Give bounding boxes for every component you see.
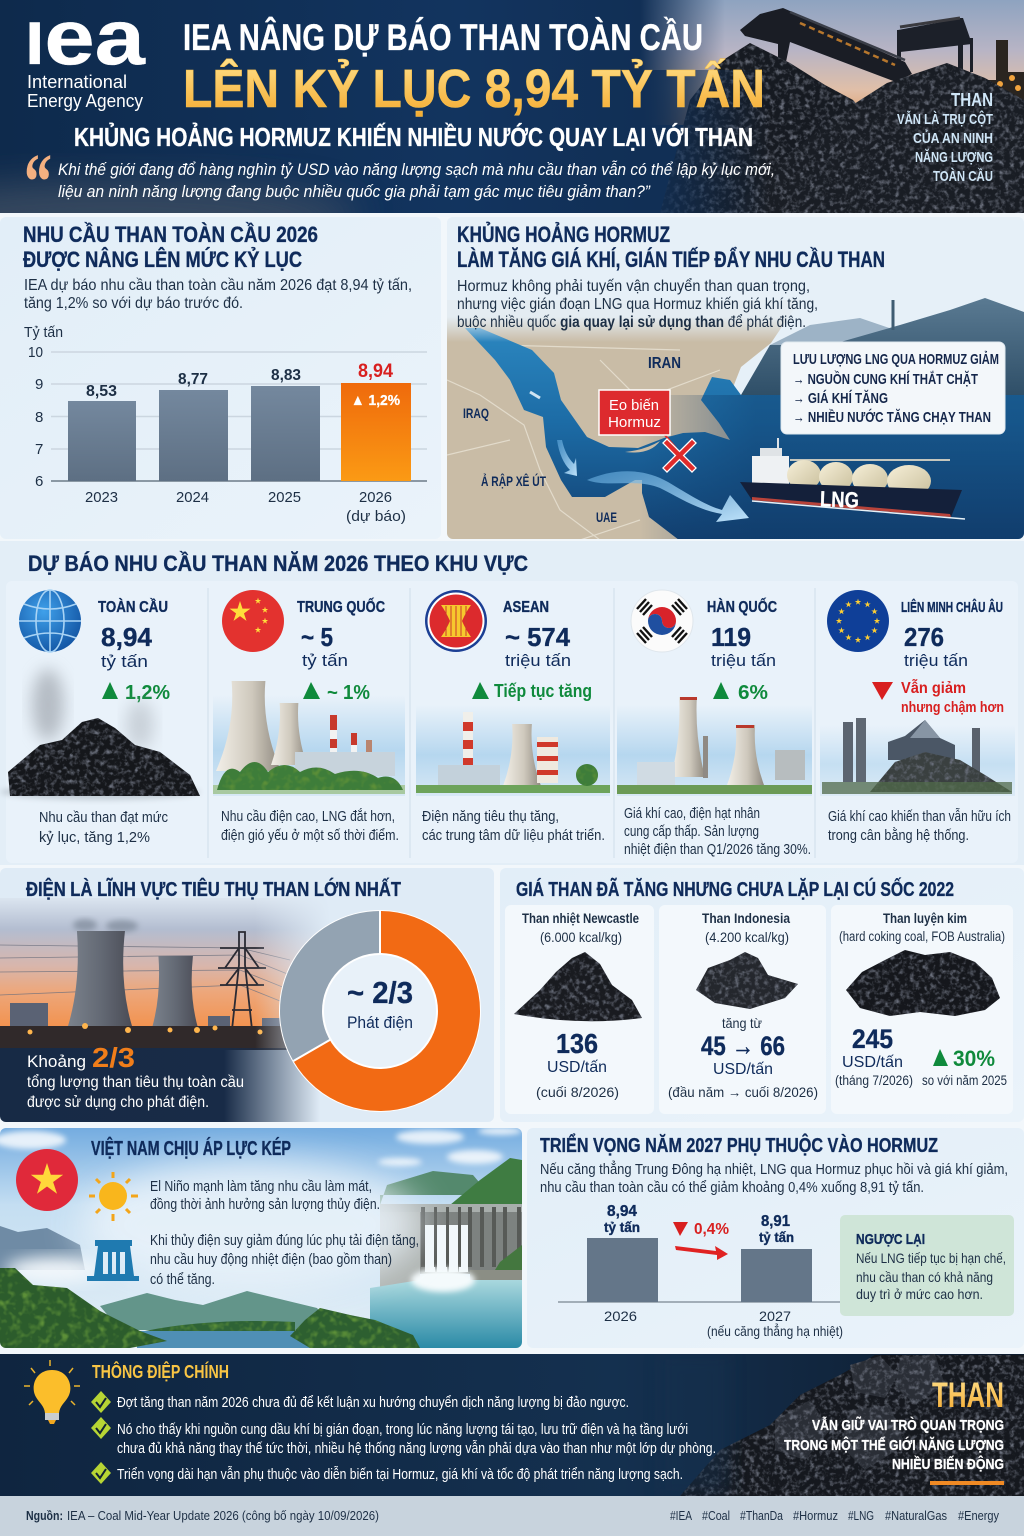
icon: globe bbox=[19, 590, 81, 652]
bars bbox=[68, 383, 411, 481]
card: coking coal: so với năm 2025 bbox=[922, 1073, 1007, 1088]
source: Nguồn: bbox=[26, 1508, 63, 1523]
icon: light bulb bbox=[24, 1360, 80, 1424]
callout: otherwise bbox=[840, 1215, 1014, 1316]
axis years: (dự báo) bbox=[346, 508, 406, 525]
values: 8,77 bbox=[178, 371, 208, 388]
bar chart: 9 bbox=[35, 376, 43, 393]
heading: NHU CẦU THAN TOÀN CẦU 2026 bbox=[23, 222, 318, 247]
card: Indonesia: Than Indonesia bbox=[702, 910, 790, 926]
bullet list: chưa đủ khả năng thay thế tức thời, nhiều hệ thống năng lượng vẫn phải dựa vào than như một lớp dự phòng. bbox=[117, 1440, 716, 1457]
map labels: Ả RẬP XÊ ÚT bbox=[481, 472, 546, 489]
icon: dam bbox=[87, 1240, 139, 1281]
hashtags: #IEA bbox=[670, 1508, 692, 1523]
column: South Korea: HÀN QUỐC bbox=[707, 596, 777, 616]
heading: KHỦNG HOẢNG HORMUZ bbox=[457, 222, 670, 247]
column: China: TRUNG QUỐC bbox=[297, 596, 385, 616]
side note bbox=[897, 90, 993, 185]
column: ASEAN: các trung tâm dữ liệu phát triển. bbox=[422, 828, 605, 844]
icon: Korea flag bbox=[631, 590, 693, 652]
values: ▲ 1,2% bbox=[351, 392, 400, 409]
card: coking coal: USD/tấn bbox=[842, 1054, 903, 1071]
change: still falling bbox=[872, 678, 1004, 716]
column: South Korea: nhiệt điện than Q1/2026 tăng 30%. bbox=[624, 842, 811, 858]
bullet list: Nó cho thấy khi nguồn cung dầu khí bị gián đoạn, trong lúc năng lượng tái tạo, lưu trữ điện và hạ tầng lưới bbox=[117, 1422, 688, 1438]
hashtags bbox=[670, 1508, 999, 1523]
map of the Strait of Hormuz bbox=[447, 298, 1024, 539]
text block bbox=[150, 1179, 380, 1213]
card: Indonesia: (đầu năm → cuối 8/2026) bbox=[668, 1084, 818, 1100]
text block: tăng 1,2% so với dự báo trước đó. bbox=[24, 295, 243, 312]
axis years: 2026 bbox=[359, 489, 392, 506]
change: up 6%: 6% bbox=[738, 682, 768, 704]
coal heaps bbox=[660, 43, 870, 213]
illustration: coal heap bbox=[0, 669, 200, 800]
illustration: coal lump bbox=[696, 952, 798, 1009]
change: still falling: Vẫn giảm bbox=[901, 678, 966, 697]
text block: buộc nhiều quốc gia quay lại sử dụng than để phát điện. bbox=[457, 314, 806, 331]
donut chart: ~ 2/3 bbox=[347, 975, 413, 1010]
card: Newcastle: Than nhiệt Newcastle bbox=[522, 910, 639, 926]
text block: IEA dự báo nhu cầu than toàn cầu năm 2026 đạt 8,94 tỷ tấn, bbox=[24, 277, 412, 294]
quote: Khi thế giới đang đổ hàng nghìn tỷ USD vào năng lượng sạch mà nhu cầu than vẫn có thể lập kỷ lục mới, bbox=[58, 160, 775, 179]
heading: TRIỂN VỌNG NĂM 2027 PHỤ THUỘC VÀO HORMUZ bbox=[540, 1133, 938, 1157]
text block: nhu cầu huy động nhiệt điện (bao gồm than) bbox=[150, 1252, 392, 1268]
text block bbox=[150, 1233, 419, 1288]
column: China: ~ 5 bbox=[301, 622, 333, 652]
heading: THÔNG ĐIỆP CHÍNH bbox=[92, 1361, 229, 1382]
text block: Khoảng bbox=[27, 1052, 86, 1071]
card: Indonesia: 45 → 66 bbox=[701, 1031, 785, 1061]
arrow bbox=[675, 1246, 728, 1260]
column: China bbox=[213, 590, 405, 844]
icon: Vietnam flag bbox=[16, 1149, 78, 1211]
change: down 0.4% bbox=[673, 1221, 729, 1238]
hashtags: #Coal bbox=[702, 1508, 730, 1523]
text block bbox=[457, 278, 818, 331]
column: ASEAN: triệu tấn bbox=[505, 651, 571, 670]
closing statement bbox=[784, 1376, 1004, 1485]
bar chart: 6 bbox=[35, 473, 43, 490]
text block: 2/3 bbox=[92, 1042, 135, 1073]
text block: tổng lượng than tiêu thụ toàn cầu bbox=[27, 1074, 244, 1091]
change: up 1.2% bbox=[102, 682, 170, 704]
axis years: 2025 bbox=[268, 489, 301, 506]
column: South Korea bbox=[617, 590, 812, 858]
column: EU: trong cân bằng hệ thống. bbox=[828, 827, 969, 844]
text block: Hormuz không phải tuyến vận chuyển than quan trọng, bbox=[457, 278, 810, 295]
illustration: power plant bbox=[213, 681, 405, 796]
heading: LÀM TĂNG GIÁ KHÍ, GIÁN TIẾP ĐẨY NHU CẦU THAN bbox=[457, 247, 885, 272]
axis years: 2023 bbox=[85, 489, 118, 506]
axis years: 2024 bbox=[176, 489, 209, 506]
illustration: power station at dusk bbox=[0, 898, 330, 1122]
bar chart: tỷ tấn bbox=[604, 1219, 640, 1235]
panel: key message bbox=[0, 1354, 1024, 1496]
icon: ASEAN emblem bbox=[425, 590, 487, 652]
logo: IEA bbox=[28, 22, 146, 111]
icon: sun bbox=[89, 1172, 138, 1221]
values: 8,53 bbox=[86, 383, 117, 400]
panel: global demand chart bbox=[0, 217, 441, 539]
illustration: coal pile bbox=[660, 1354, 1024, 1496]
card: Indonesia: tăng từ bbox=[722, 1015, 762, 1031]
bullet list: Đợt tăng than năm 2026 chưa đủ để kết luận xu hướng chuyển dịch năng lượng bị đảo ngược. bbox=[117, 1395, 629, 1411]
heading: VIỆT NAM CHỊU ÁP LỰC KÉP bbox=[91, 1136, 291, 1160]
icon: check bbox=[91, 1391, 111, 1413]
logo: IEA: International bbox=[27, 72, 127, 92]
panel: coal prices bbox=[500, 868, 1024, 1122]
side note: VẪN LÀ TRỤ CỘT bbox=[897, 110, 993, 128]
strait label: Eo biến bbox=[609, 397, 659, 414]
hashtags: #ThanDa bbox=[740, 1508, 784, 1523]
bar chart bbox=[558, 1203, 843, 1339]
icon: check bbox=[91, 1417, 111, 1439]
ship: LNG carrier: LNG bbox=[820, 486, 859, 513]
change: still falling: nhưng chậm hơn bbox=[901, 699, 1004, 716]
card: coking coal: (tháng 7/2026) bbox=[835, 1073, 913, 1088]
mountains bbox=[741, 298, 1024, 395]
heading: ĐIỆN LÀ LĨNH VỰC TIÊU THỤ THAN LỚN NHẤT bbox=[26, 877, 401, 901]
column: ASEAN: Điện năng tiêu thụ tăng, bbox=[422, 809, 559, 825]
values: 8,83 bbox=[271, 367, 301, 384]
column: China: tỷ tấn bbox=[302, 651, 348, 670]
change: keeps rising: Tiếp tục tăng bbox=[494, 681, 592, 701]
panel: regional demand bbox=[0, 541, 1024, 865]
column: China: Nhu cầu điện cao, LNG đắt hơn, bbox=[221, 808, 395, 825]
title bbox=[74, 16, 765, 152]
column: EU: triệu tấn bbox=[904, 651, 968, 670]
callout bbox=[781, 342, 1005, 434]
illustration: coal mine with conveyor bbox=[640, 0, 1024, 213]
icon: China flag bbox=[222, 590, 284, 652]
illustration: coal heap bbox=[514, 952, 642, 1021]
change: up 6% bbox=[713, 682, 768, 704]
change: down 0.4%: 0,4% bbox=[694, 1221, 729, 1238]
side note: THAN bbox=[951, 90, 993, 110]
column: China: điện gió yếu ở một số thời điểm. bbox=[221, 828, 399, 844]
right tower bbox=[897, 18, 973, 72]
bar chart bbox=[24, 324, 427, 525]
change: up 30%: 30% bbox=[953, 1046, 995, 1071]
map labels: UAE bbox=[596, 509, 617, 525]
bar chart: 8,94 bbox=[607, 1203, 637, 1220]
change: up about 1% bbox=[303, 682, 370, 704]
card: Indonesia: USD/tấn bbox=[713, 1061, 773, 1078]
panel: Hormuz crisis bbox=[447, 217, 1024, 540]
bar chart: 2027 bbox=[759, 1308, 791, 1324]
closing statement: NHIỀU BIẾN ĐỘNG bbox=[892, 1455, 1004, 1473]
card: Newcastle: (cuối 8/2026) bbox=[536, 1084, 619, 1100]
text block: nhưng việc gián đoạn LNG qua Hormuz khiến giá khí tăng, bbox=[457, 296, 818, 313]
card: Indonesia bbox=[659, 905, 826, 1114]
column: ASEAN bbox=[416, 590, 610, 844]
panel: Vietnam bbox=[0, 1127, 522, 1348]
column: global: 8,94 bbox=[101, 622, 153, 652]
bullet list bbox=[91, 1391, 716, 1484]
hashtags: #Energy bbox=[958, 1508, 999, 1523]
bar chart: 8 bbox=[35, 409, 43, 426]
title: IEA NÂNG DỰ BÁO THAN TOÀN CẦU bbox=[183, 16, 703, 58]
text block: được sử dụng cho phát điện. bbox=[27, 1094, 209, 1111]
quote: liệu an ninh năng lượng đang buộc nhiều quốc gia phải tạm gác mục tiêu giảm than?” bbox=[58, 182, 651, 201]
quote: “ bbox=[24, 139, 52, 227]
map labels bbox=[463, 355, 681, 525]
card: Indonesia: (4.200 kcal/kg) bbox=[705, 929, 789, 945]
footer bbox=[0, 1496, 1024, 1536]
column: global: kỷ lục, tăng 1,2% bbox=[39, 830, 150, 846]
illustration: power plant and coal bbox=[820, 718, 1015, 796]
card: Newcastle: (6.000 kcal/kg) bbox=[540, 929, 622, 945]
column: South Korea: triệu tấn bbox=[711, 651, 776, 670]
text block bbox=[540, 1160, 1008, 1196]
column: global bbox=[0, 590, 200, 846]
text block: El Niño mạnh làm tăng nhu cầu làm mát, bbox=[150, 1179, 372, 1195]
illustration: coal lumps bbox=[846, 950, 1000, 1016]
text block: Khi thủy điện suy giảm đúng lúc phụ tải điện tăng, bbox=[150, 1233, 419, 1249]
column: EU bbox=[820, 590, 1015, 844]
header banner bbox=[0, 0, 1024, 213]
card: coking coal: Than luyện kim bbox=[883, 910, 967, 926]
column: ASEAN: ASEAN bbox=[503, 599, 549, 616]
column: global: TOÀN CẦU bbox=[98, 597, 168, 616]
donut chart: Phát điện bbox=[347, 1013, 413, 1032]
icon: EU flag bbox=[827, 590, 889, 652]
column: global: Nhu cầu than đạt mức bbox=[39, 810, 168, 826]
bar chart: 10 bbox=[28, 344, 43, 361]
column: South Korea: 119 bbox=[711, 622, 751, 652]
heading: ĐƯỢC NÂNG LÊN MỨC KỶ LỤC bbox=[23, 247, 302, 272]
card: coking coal: 245 bbox=[852, 1024, 893, 1054]
conveyor bbox=[740, 8, 912, 82]
card: Newcastle: 136 bbox=[556, 1028, 598, 1059]
panel: electricity consumption bbox=[0, 868, 494, 1122]
axis years bbox=[85, 489, 406, 525]
title: LÊN KỶ LỤC 8,94 TỶ TẤN bbox=[183, 58, 765, 119]
card: Newcastle bbox=[505, 905, 654, 1114]
icon: check bbox=[91, 1462, 111, 1484]
column: global: tỷ tấn bbox=[101, 652, 148, 671]
callout: → GIÁ KHÍ TĂNG bbox=[793, 390, 888, 407]
bar chart: Tỷ tấn bbox=[24, 324, 63, 341]
hashtags: #NaturalGas bbox=[885, 1508, 947, 1523]
bar chart: 7 bbox=[35, 441, 43, 458]
source: IEA – Coal Mid-Year Update 2026 (công bố ngày 10/09/2026) bbox=[67, 1508, 379, 1523]
change: up 30% bbox=[933, 1046, 995, 1071]
card: Newcastle: USD/tấn bbox=[547, 1059, 607, 1076]
ship: LNG carrier bbox=[740, 438, 965, 519]
column: ASEAN: ~ 574 bbox=[505, 622, 571, 652]
illustration: hydropower landscape bbox=[0, 1127, 522, 1348]
change: up about 1%: ~ 1% bbox=[327, 682, 370, 704]
callout: otherwise: NGƯỢC LẠI bbox=[856, 1231, 925, 1248]
icon: red cross bbox=[667, 443, 692, 468]
change: up 1.2%: 1,2% bbox=[125, 682, 170, 704]
text block: đồng thời ảnh hưởng sản lượng thủy điện. bbox=[150, 1197, 380, 1213]
hashtags: #Hormuz bbox=[793, 1508, 838, 1523]
column: EU: 276 bbox=[904, 622, 944, 652]
callout: otherwise: nhu cầu than có khả năng bbox=[856, 1269, 993, 1285]
bar chart: tỷ tấn bbox=[759, 1229, 794, 1245]
side note: TOÀN CẦU bbox=[933, 168, 993, 185]
bar chart: (nếu căng thẳng hạ nhiệt) bbox=[707, 1322, 843, 1339]
illustration: power plant bbox=[416, 705, 610, 796]
text block bbox=[27, 1042, 244, 1111]
card: coking coal bbox=[831, 905, 1013, 1114]
donut chart bbox=[279, 910, 481, 1112]
callout: otherwise: duy trì ở mức cao hơn. bbox=[856, 1286, 983, 1302]
heading bbox=[457, 222, 885, 272]
bar chart: 2026 bbox=[604, 1308, 637, 1324]
quote bbox=[26, 155, 774, 200]
bar chart: 8,91 bbox=[761, 1213, 790, 1230]
illustration: power plant bbox=[617, 697, 812, 796]
text block bbox=[24, 277, 412, 312]
strait label bbox=[599, 390, 676, 448]
column: South Korea: Giá khí cao, điện hạt nhân bbox=[624, 806, 760, 822]
heading: DỰ BÁO NHU CẦU THAN NĂM 2026 THEO KHU VỰC bbox=[28, 551, 528, 576]
panel: 2027 outlook bbox=[527, 1128, 1024, 1348]
plant on the right bbox=[988, 40, 1024, 100]
heading bbox=[23, 222, 318, 272]
title: KHỦNG HOẢNG HORMUZ KHIẾN NHIỀU NƯỚC QUAY LẠI VỚI THAN bbox=[74, 121, 753, 152]
strait label: Hormuz bbox=[608, 414, 661, 431]
values bbox=[86, 361, 400, 409]
side note: CỦA AN NINH bbox=[913, 129, 993, 147]
map labels: IRAQ bbox=[463, 405, 489, 421]
text block: nhu cầu than toàn cầu có thể giảm khoảng 0,4% xuống 8,91 tỷ tấn. bbox=[540, 1180, 924, 1196]
bullet list: Triển vọng dài hạn vẫn phụ thuộc vào diễn biến tại Hormuz, giá khí và tốc độ phát triển năng lượng sạch. bbox=[117, 1466, 683, 1483]
side note: NĂNG LƯỢNG bbox=[915, 149, 993, 166]
map labels: IRAN bbox=[648, 355, 681, 372]
cards background bbox=[6, 581, 1018, 863]
column: South Korea: cung cấp thấp. Sản lượng bbox=[624, 824, 759, 840]
hashtags: #LNG bbox=[848, 1508, 874, 1523]
logo: IEA: Energy Agency bbox=[27, 91, 143, 111]
text block: có thể tăng. bbox=[150, 1272, 215, 1288]
values: 8,94 bbox=[358, 361, 393, 382]
